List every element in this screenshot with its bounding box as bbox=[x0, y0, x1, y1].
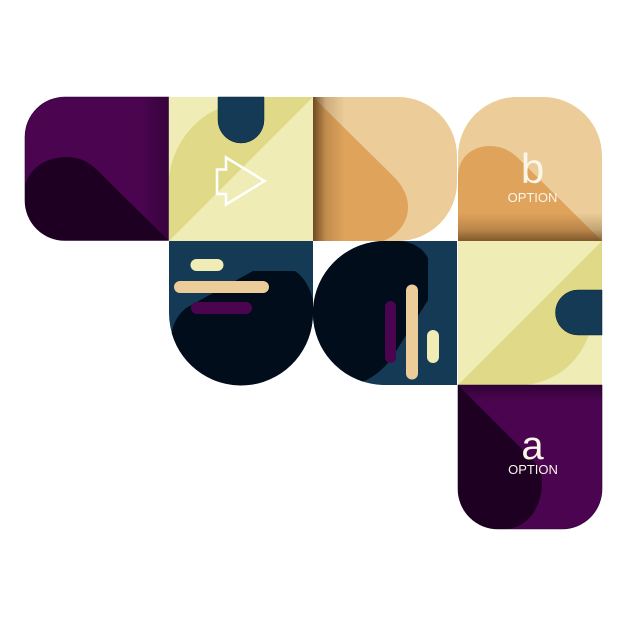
bar: cream bbox=[427, 330, 439, 363]
panel: cream tile with tab bbox=[458, 241, 602, 385]
icon: outlined arrow bbox=[217, 158, 264, 204]
bottom shadow bbox=[458, 213, 602, 241]
dark diagonal shape bbox=[458, 385, 542, 529]
navy tab bbox=[218, 97, 264, 143]
bar: tan bbox=[174, 281, 269, 293]
panel: navy tile with vertical bars bbox=[313, 241, 457, 385]
letter a: a bbox=[521, 424, 544, 468]
orange wave shape bbox=[458, 146, 602, 241]
panel: purple tile top left bbox=[25, 97, 168, 241]
panel: purple tile option a bbox=[458, 385, 602, 529]
bar: tan bbox=[406, 284, 418, 380]
dark shape bbox=[313, 241, 428, 382]
bar: purple bbox=[385, 301, 396, 363]
dark shape bbox=[172, 271, 313, 385]
left shadow bbox=[313, 97, 345, 241]
label: option: OPTION bbox=[508, 462, 558, 477]
yellow diagonal shape bbox=[458, 241, 602, 385]
yellow diagonal shape bbox=[169, 97, 313, 241]
navy tab bbox=[556, 290, 602, 335]
letter b: b bbox=[521, 145, 544, 192]
label: option: OPTION bbox=[508, 190, 557, 205]
bar: purple bbox=[191, 302, 252, 314]
panel: navy tile with bars bbox=[169, 241, 313, 385]
panel: cream tile with arrow bbox=[169, 97, 313, 241]
orange diagonal shape bbox=[313, 97, 408, 241]
bar: cream bbox=[190, 259, 224, 271]
dark wave shape bbox=[25, 157, 168, 240]
panel: tan tile with rounded right side bbox=[313, 97, 457, 241]
panel: tan tile option b bbox=[458, 97, 602, 241]
